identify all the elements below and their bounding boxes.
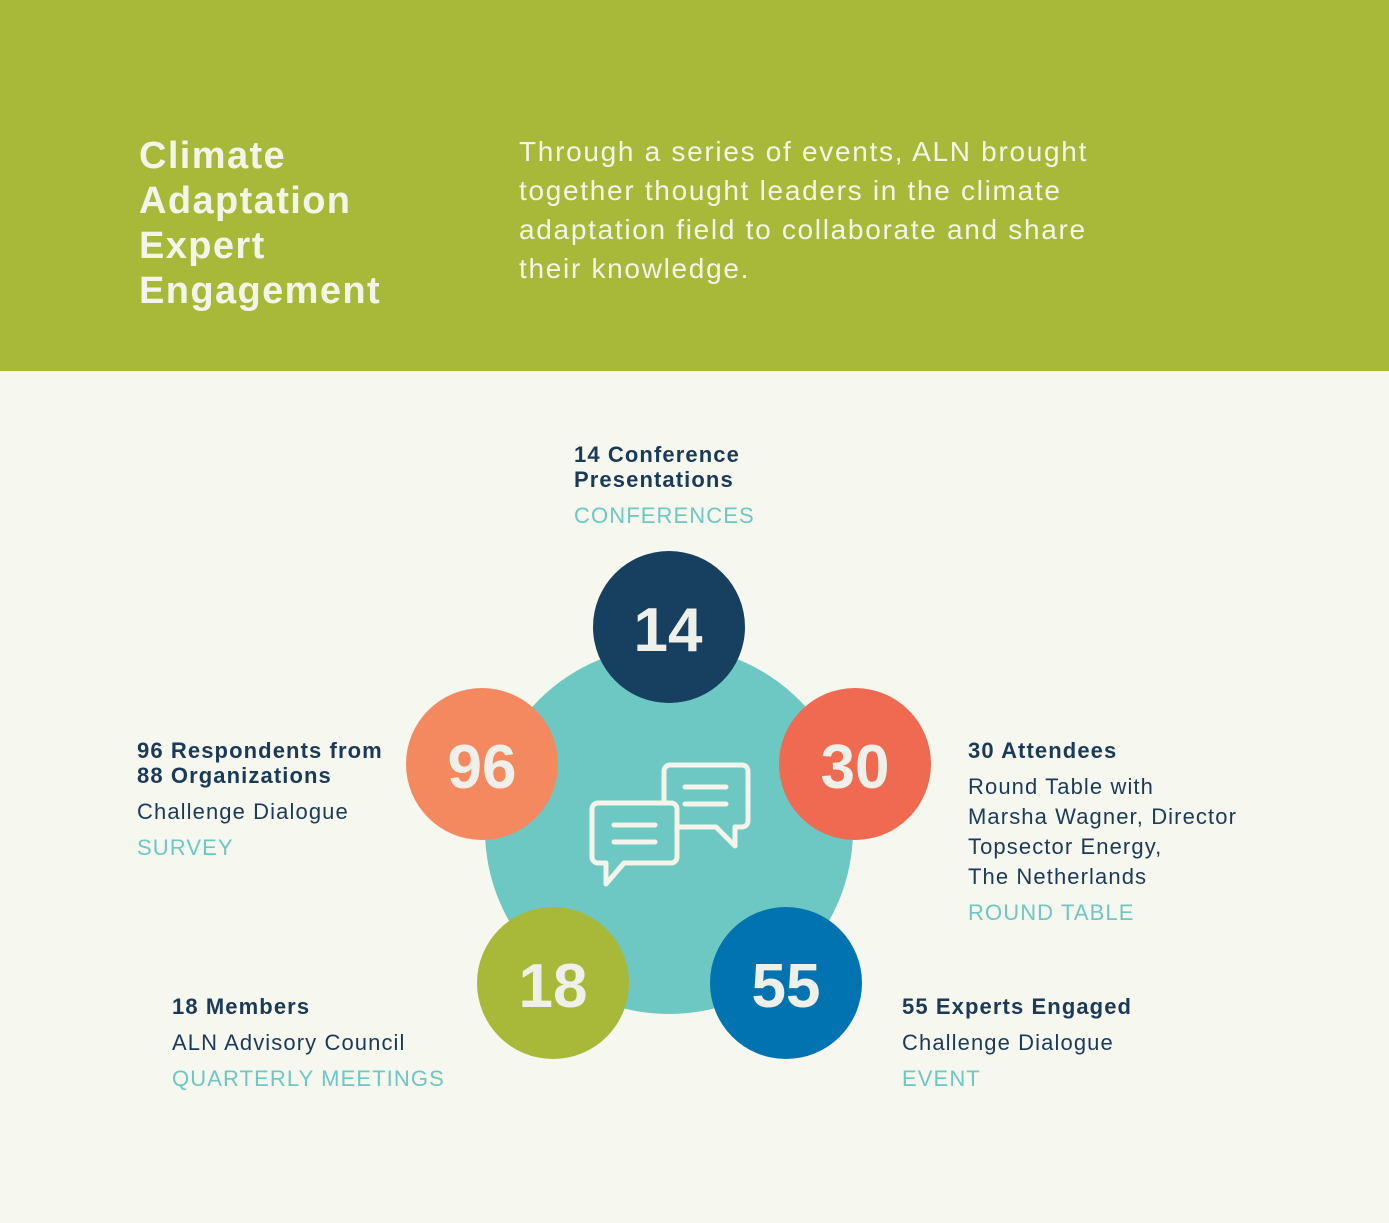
intro text: adaptation field to collaborate and share <box>519 214 1087 245</box>
circle 14 <box>593 551 745 703</box>
label: survey: 96 Respondents from <box>137 738 383 763</box>
label: round table: The Netherlands <box>968 864 1147 889</box>
label: quarterly meetings: ALN Advisory Council <box>172 1030 406 1055</box>
label: quarterly meetings: QUARTERLY MEETINGS <box>172 1066 445 1091</box>
circle 30 <box>779 688 931 840</box>
circle 55 <box>710 907 862 1059</box>
label: quarterly meetings: 18 Members <box>172 994 310 1019</box>
title: Climate <box>139 135 286 177</box>
label: event: EVENT <box>902 1066 981 1091</box>
circle 18 <box>477 907 629 1059</box>
label: round table: Marsha Wagner, Director <box>968 804 1237 829</box>
circle 55: 55 <box>752 952 820 1021</box>
label: round table: 30 Attendees <box>968 738 1117 763</box>
circle 30: 30 <box>821 733 889 802</box>
label: survey: Challenge Dialogue <box>137 799 349 824</box>
intro text <box>519 136 1088 284</box>
label: event <box>902 994 1132 1091</box>
circle 96 <box>406 688 558 840</box>
label: event: 55 Experts Engaged <box>902 994 1132 1019</box>
label: round table <box>968 738 1237 925</box>
label: survey: 88 Organizations <box>137 763 332 788</box>
intro text: Through a series of events, ALN brought <box>519 136 1088 167</box>
title <box>139 135 381 312</box>
label: conferences <box>574 442 755 528</box>
label: survey: SURVEY <box>137 835 234 860</box>
label: event: Challenge Dialogue <box>902 1030 1114 1055</box>
label: conferences: CONFERENCES <box>574 503 755 528</box>
label: conferences: 14 Conference <box>574 442 740 467</box>
label: quarterly meetings <box>172 994 445 1091</box>
label: round table: ROUND TABLE <box>968 900 1135 925</box>
label: conferences: Presentations <box>574 467 734 492</box>
central circle <box>485 646 853 1014</box>
intro text: together thought leaders in the climate <box>519 175 1062 206</box>
title: Expert <box>139 225 266 267</box>
label: round table: Round Table with <box>968 774 1154 799</box>
circle 14: 14 <box>634 596 703 665</box>
title: Engagement <box>139 270 381 312</box>
intro text: their knowledge. <box>519 253 750 284</box>
label: survey <box>137 738 383 860</box>
icon: chat bubbles <box>592 765 748 884</box>
circle 96: 96 <box>448 733 516 802</box>
header band <box>0 0 1389 371</box>
title: Adaptation <box>139 180 351 222</box>
label: round table: Topsector Energy, <box>968 834 1162 859</box>
circle 18: 18 <box>519 952 587 1021</box>
